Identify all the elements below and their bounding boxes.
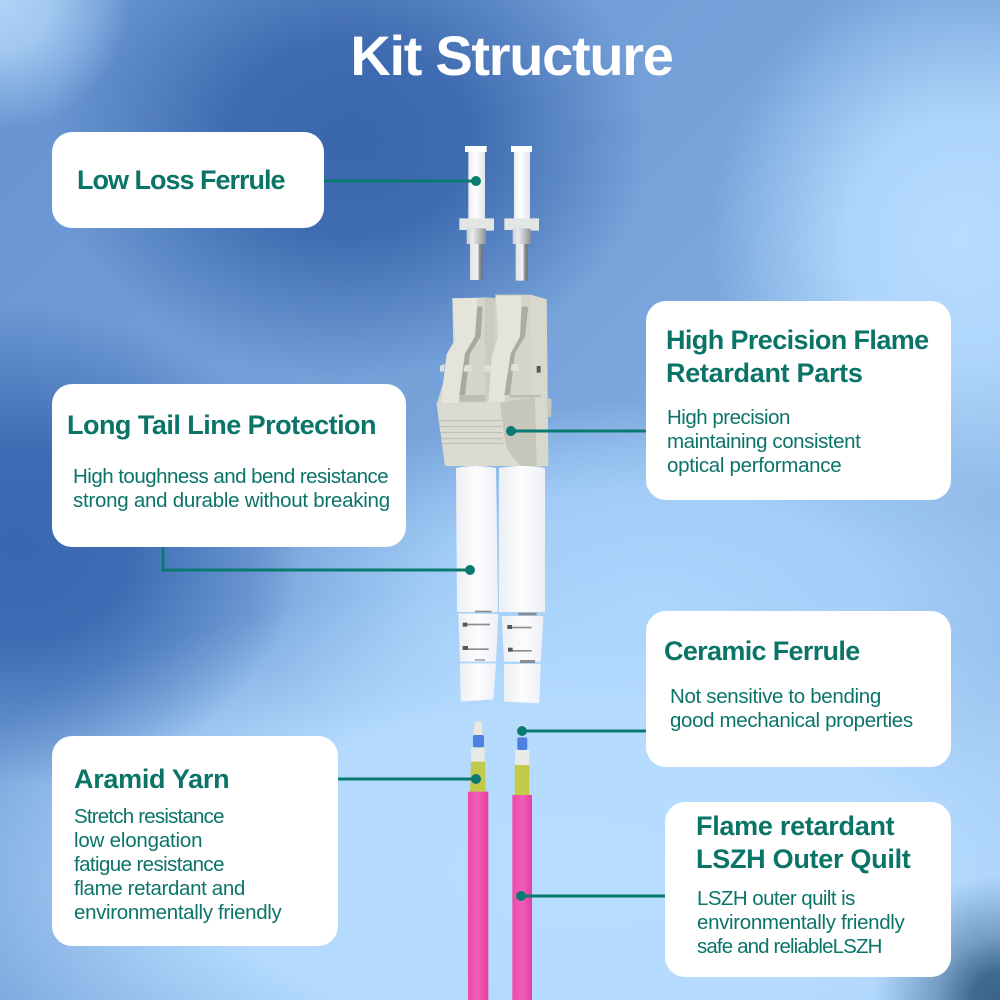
text block: [697, 887, 905, 958]
text block: strong and durable without breaking: [73, 489, 390, 512]
heading: Retardant Parts: [666, 358, 863, 388]
text block: safe and reliableLSZH: [697, 935, 882, 958]
heading: High Precision Flame: [666, 325, 929, 355]
text block: low elongation: [74, 829, 202, 852]
text block: optical performance: [667, 454, 841, 477]
heading: LSZH Outer Quilt: [696, 844, 911, 874]
callout: Ceramic Ferrule: [646, 611, 951, 767]
text block: Not sensitive to bending: [670, 685, 881, 708]
text block: environmentally friendly: [697, 911, 904, 934]
text block: good mechanical properties: [670, 709, 913, 732]
callout: Long Tail Line Protection: [52, 384, 406, 547]
text block: [667, 406, 861, 477]
callout: High Precision Flame Retardant Parts: [646, 301, 951, 500]
heading: Low Loss Ferrule: [77, 165, 285, 195]
text block: environmentally friendly: [74, 901, 281, 924]
icon: strain relief boots: [456, 466, 545, 703]
heading: [696, 811, 911, 874]
text block: [670, 685, 913, 732]
text block: [73, 465, 390, 512]
callout: Flame retardant LSZH Outer Quilt: [665, 802, 951, 977]
text block: [74, 805, 282, 924]
icon: ferrules: [459, 146, 539, 281]
heading: Long Tail Line Protection: [67, 410, 376, 440]
leader line: High Precision Parts: [506, 426, 646, 436]
text block: flame retardant and: [74, 877, 245, 900]
title: Kit Structure: [350, 24, 673, 87]
text block: Stretch resistance: [74, 805, 224, 828]
text block: fatigue resistance: [74, 853, 224, 876]
heading: [666, 325, 929, 388]
callout: Aramid Yarn: [52, 736, 338, 946]
text block: High precision: [667, 406, 790, 429]
icon: LC connector housing: [437, 295, 552, 467]
text block: High toughness and bend resistance: [73, 465, 388, 488]
leader line: Low Loss Ferrule: [324, 176, 481, 186]
leader line: LSZH Outer Quilt: [516, 891, 665, 901]
text block: maintaining consistent: [667, 430, 860, 453]
leader line: Aramid Yarn: [338, 774, 481, 784]
icon: stripped fibres and pink cables: [468, 722, 532, 1000]
leader line: Ceramic Ferrule: [517, 726, 646, 736]
heading: Flame retardant: [696, 811, 894, 841]
leader line: Long Tail Line Protection: [163, 547, 475, 575]
text block: LSZH outer quilt is: [697, 887, 855, 910]
heading: Aramid Yarn: [74, 764, 229, 794]
callout: Low Loss Ferrule: [52, 132, 324, 228]
heading: Ceramic Ferrule: [664, 636, 860, 666]
